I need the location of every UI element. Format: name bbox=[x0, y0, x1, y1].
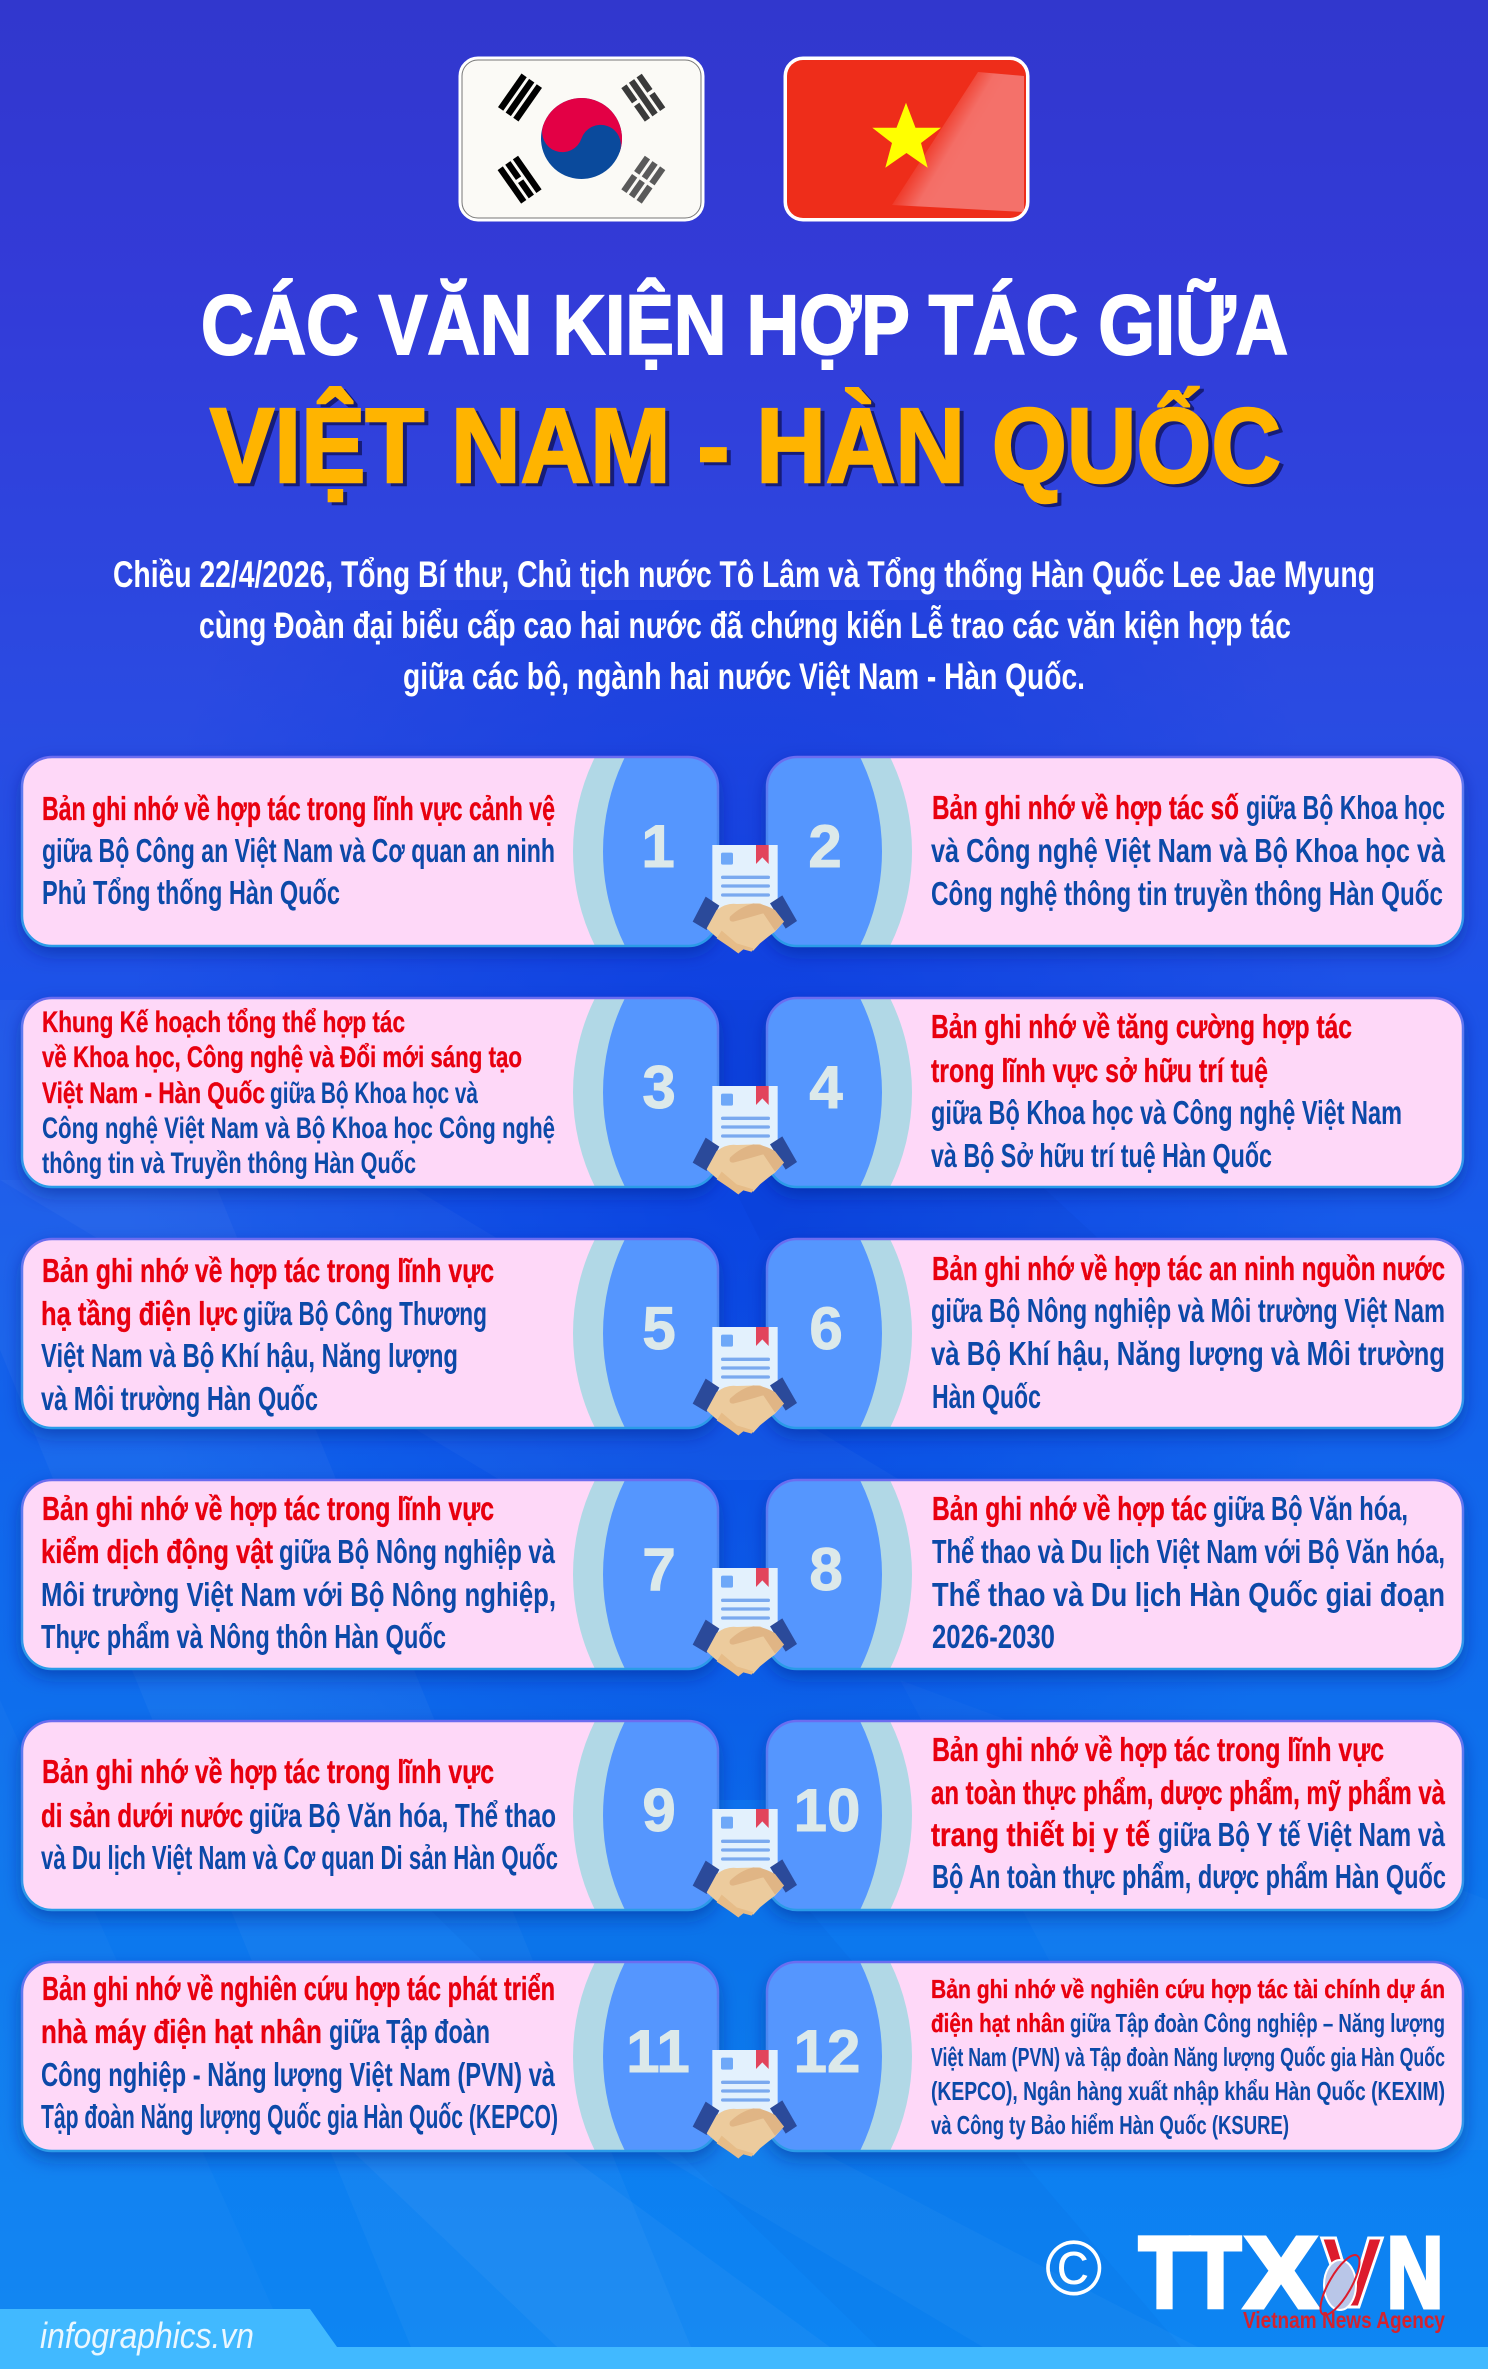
panel: agreement 7: kiểm dịch động vật bbox=[41, 1533, 273, 1570]
title line 2: VIỆT NAM - HÀN QUỐC bbox=[210, 387, 1281, 505]
panel: agreement 11: nhà máy điện hạt nhân bbox=[41, 2013, 322, 2050]
panel: agreement 5: hạ tầng điện lực bbox=[41, 1295, 238, 1332]
panel: agreement 11: Công nghiệp - Năng lượng Việt Nam (PVN) và bbox=[41, 2056, 555, 2093]
panel: agreement 9: và Du lịch Việt Nam và Cơ quan Di sản Hàn Quốc bbox=[41, 1839, 558, 1876]
panel: agreement 5: giữa Bộ Công Thương bbox=[243, 1295, 487, 1332]
icon: handshake over document, row 2 bbox=[693, 1086, 797, 1194]
panel: agreement 5: Việt Nam và Bộ Khí hậu, Năng lượng bbox=[41, 1337, 458, 1374]
panel: agreement 8: 2026-2030 bbox=[932, 1618, 1055, 1655]
flag: South Korea bbox=[460, 58, 703, 220]
copyright symbol: © bbox=[1045, 2224, 1102, 2312]
panel: agreement 5: và Môi trường Hàn Quốc bbox=[41, 1380, 318, 1417]
panel: agreement 4 bbox=[767, 998, 1463, 1187]
panel: agreement 1: Bản ghi nhớ về hợp tác trong lĩnh vực cảnh vệ bbox=[42, 790, 555, 827]
panel: agreement 12: 12 bbox=[794, 2018, 860, 2085]
panel: agreement 8: Bản ghi nhớ về hợp tác bbox=[932, 1490, 1207, 1527]
panel: agreement 3: giữa Bộ Khoa học và bbox=[270, 1077, 478, 1110]
intro text bbox=[113, 554, 1375, 697]
panel: agreement 3: về Khoa học, Công nghệ và Đổi mới sáng tạo bbox=[42, 1041, 522, 1074]
panel: agreement 12 bbox=[767, 1962, 1463, 2151]
panel: agreement 6: Hàn Quốc bbox=[932, 1378, 1041, 1415]
panel: agreement 4: và Bộ Sở hữu trí tuệ Hàn Quốc bbox=[931, 1137, 1272, 1174]
panel: agreement 9: di sản dưới nước bbox=[41, 1797, 243, 1834]
footer bar with website tab: infographics.vn bbox=[40, 2315, 254, 2356]
panel: agreement 1: giữa Bộ Công an Việt Nam và Cơ quan an ninh bbox=[42, 832, 555, 869]
panel: agreement 4: 4 bbox=[809, 1054, 843, 1121]
panel: agreement 10 bbox=[767, 1721, 1463, 1910]
panel: agreement 8: 8 bbox=[809, 1536, 843, 1603]
panel: agreement 8 bbox=[767, 1480, 1463, 1669]
logo: TTXVN Vietnam News Agency: Vietnam News Agency bbox=[1243, 2307, 1445, 2333]
title line 2: VIỆT NAM - HÀN QUỐC bbox=[214, 390, 1285, 508]
panel: agreement 8: giữa Bộ Văn hóa, bbox=[1213, 1490, 1408, 1527]
icon: handshake over document, row 4 bbox=[693, 1568, 797, 1676]
panel: agreement 9: 9 bbox=[642, 1777, 676, 1844]
panel: agreement 1: Phủ Tổng thống Hàn Quốc bbox=[42, 874, 340, 911]
panel: agreement 12: và Công ty Bảo hiểm Hàn Quốc (KSURE) bbox=[931, 2110, 1289, 2140]
panel: agreement 9: Bản ghi nhớ về hợp tác trong lĩnh vực bbox=[42, 1753, 494, 1790]
logo: TTXVN Vietnam News Agency bbox=[1139, 2217, 1445, 2333]
panel: agreement 4: Bản ghi nhớ về tăng cường hợp tác bbox=[931, 1008, 1352, 1045]
panel: agreement 4: trong lĩnh vực sở hữu trí tuệ bbox=[931, 1052, 1268, 1089]
title line 1: CÁC VĂN KIỆN HỢP TÁC GIỮA bbox=[201, 278, 1288, 372]
icon: handshake over document, row 1 bbox=[693, 845, 797, 953]
logo: TTXVN Vietnam News Agency: TT bbox=[1139, 2217, 1241, 2329]
panel: agreement 6 bbox=[767, 1239, 1463, 1428]
panel: agreement 7: giữa Bộ Nông nghiệp và bbox=[279, 1533, 555, 1570]
icon: handshake over document, row 6 bbox=[693, 2050, 797, 2158]
panel: agreement 3: Khung Kế hoạch tổng thể hợp tác bbox=[42, 1006, 405, 1039]
panel: agreement 7 bbox=[22, 1480, 718, 1669]
panel: agreement 10: 10 bbox=[794, 1777, 860, 1844]
panel: agreement 3: Công nghệ Việt Nam và Bộ Khoa học Công nghệ bbox=[42, 1112, 555, 1145]
panel: agreement 7: Môi trường Việt Nam với Bộ Nông nghiệp, bbox=[41, 1576, 556, 1613]
panel: agreement 9: giữa Bộ Văn hóa, Thể thao bbox=[249, 1797, 556, 1834]
panel: agreement 2 bbox=[767, 757, 1463, 946]
panel: agreement 3: thông tin và Truyền thông Hàn Quốc bbox=[42, 1147, 416, 1180]
intro text: giữa các bộ, ngành hai nước Việt Nam - Hàn Quốc. bbox=[403, 656, 1085, 697]
panel: agreement 7: Thực phẩm và Nông thôn Hàn Quốc bbox=[41, 1618, 446, 1655]
logo: TTXVN Vietnam News Agency: V bbox=[1321, 2217, 1383, 2329]
icon: handshake over document, row 5 bbox=[693, 1809, 797, 1917]
panel: agreement 11 bbox=[22, 1962, 718, 2151]
panel: agreement 9 bbox=[22, 1721, 718, 1910]
panel: agreement 11: Tập đoàn Năng lượng Quốc gia Hàn Quốc (KEPCO) bbox=[41, 2098, 558, 2135]
panel: agreement 7: Bản ghi nhớ về hợp tác trong lĩnh vực bbox=[42, 1490, 494, 1527]
logo: TTXVN Vietnam News Agency: N bbox=[1387, 2217, 1443, 2329]
panel: agreement 3 bbox=[22, 998, 718, 1187]
panel: agreement 12: điện hạt nhân bbox=[931, 2008, 1065, 2038]
panel: agreement 3: Việt Nam - Hàn Quốc bbox=[42, 1077, 265, 1110]
panel: agreement 5: Bản ghi nhớ về hợp tác trong lĩnh vực bbox=[42, 1252, 494, 1289]
panel: agreement 2: Bản ghi nhớ về hợp tác số bbox=[932, 789, 1239, 826]
flag: Vietnam bbox=[785, 58, 1028, 220]
logo: TTXVN Vietnam News Agency: X bbox=[1245, 2217, 1317, 2329]
panel: agreement 11: Bản ghi nhớ về nghiên cứu hợp tác phát triển bbox=[42, 1970, 555, 2007]
panel: agreement 1: 1 bbox=[641, 813, 675, 880]
panel: agreement 7: 7 bbox=[642, 1536, 676, 1603]
panel: agreement 2: 2 bbox=[808, 813, 842, 880]
footer bar with website tab bbox=[0, 2309, 1488, 2369]
panel: agreement 5: 5 bbox=[642, 1295, 676, 1362]
panel: agreement 1 bbox=[22, 757, 718, 946]
icon: handshake over document, row 3 bbox=[693, 1327, 797, 1435]
panel: agreement 6: 6 bbox=[809, 1295, 843, 1362]
panel: agreement 11: giữa Tập đoàn bbox=[329, 2013, 490, 2050]
panel: agreement 3: 3 bbox=[642, 1054, 676, 1121]
panel: agreement 5 bbox=[22, 1239, 718, 1428]
panel: agreement 10: trang thiết bị y tế bbox=[931, 1816, 1151, 1853]
panel: agreement 11: 11 bbox=[626, 2018, 690, 2085]
